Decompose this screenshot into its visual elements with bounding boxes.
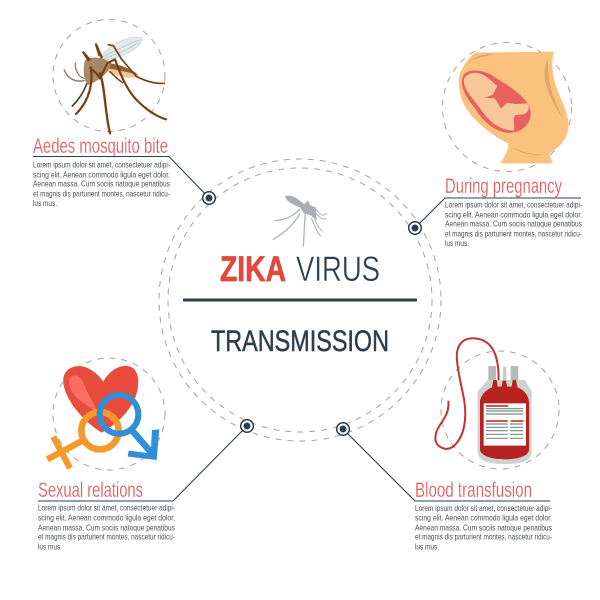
heading: Sexual relations xyxy=(38,479,143,502)
text block xyxy=(415,504,552,552)
panel: During pregnancy xyxy=(415,42,582,248)
heading: Aedes mosquito bite xyxy=(33,135,168,158)
text block: Lorem ipsum dolor sit amet, consectetuer adipi- xyxy=(33,160,170,170)
text block: et magnis dis parturient montes, nascetur ridicu- xyxy=(415,532,552,542)
panel: Sexual relations xyxy=(38,358,247,552)
text block: scing elit. Aenean commodo ligula eget dolor. xyxy=(415,514,552,522)
text block xyxy=(33,160,170,208)
connector line xyxy=(33,156,209,198)
text block xyxy=(38,504,175,552)
icon: pregnant belly xyxy=(459,52,569,163)
text block: Aenean massa. Cum sociis natoque penatibus xyxy=(33,180,170,188)
text block: lus mus. xyxy=(415,542,439,552)
panel: Blood transfusion xyxy=(343,338,559,552)
title: ZIKA VIRUS: ZIKA xyxy=(220,250,286,289)
connector line xyxy=(38,426,247,501)
heading: TRANSMISSION: TRANSMISSION xyxy=(211,325,389,358)
icon: heart with gender symbols xyxy=(47,366,159,468)
central dashed rings xyxy=(159,159,441,441)
text block: lus mus. xyxy=(38,542,62,552)
title divider xyxy=(183,298,417,302)
text block: Aenean massa. Cum sociis natoque penatibus xyxy=(38,524,175,532)
icon: blood bag xyxy=(435,338,532,464)
connector line xyxy=(415,198,581,228)
text block: Lorem ipsum dolor sit amet, consectetuer adipi- xyxy=(415,504,552,513)
panel: Aedes mosquito bite xyxy=(33,20,209,208)
text block: Aenean massa. Cum sociis natoque penatibus xyxy=(415,524,552,532)
text block xyxy=(445,200,582,248)
text block: Lorem ipsum dolor sit amet, consectetuer adipi- xyxy=(38,504,175,512)
text block: scing elit. Aenean commodo ligula eget dolor. xyxy=(38,514,175,522)
title: ZIKA VIRUS xyxy=(220,250,380,289)
text block: lus mus. xyxy=(33,199,57,208)
connector nodes on ring xyxy=(203,192,421,435)
title: ZIKA VIRUS: VIRUS xyxy=(296,250,380,289)
icon: small grey mosquito xyxy=(273,195,327,246)
text block: scing elit. Aenean commodo ligula eget dolor. xyxy=(33,170,170,180)
heading: Blood transfusion xyxy=(415,479,532,502)
icon: mosquito xyxy=(64,37,166,133)
text block: lus mus. xyxy=(445,239,469,248)
text block: et magnis dis parturient montes, nascetur ridicu- xyxy=(38,532,175,542)
text block: et magnis dis parturient montes, nascetur ridicu- xyxy=(33,190,170,198)
connector line xyxy=(343,429,550,501)
